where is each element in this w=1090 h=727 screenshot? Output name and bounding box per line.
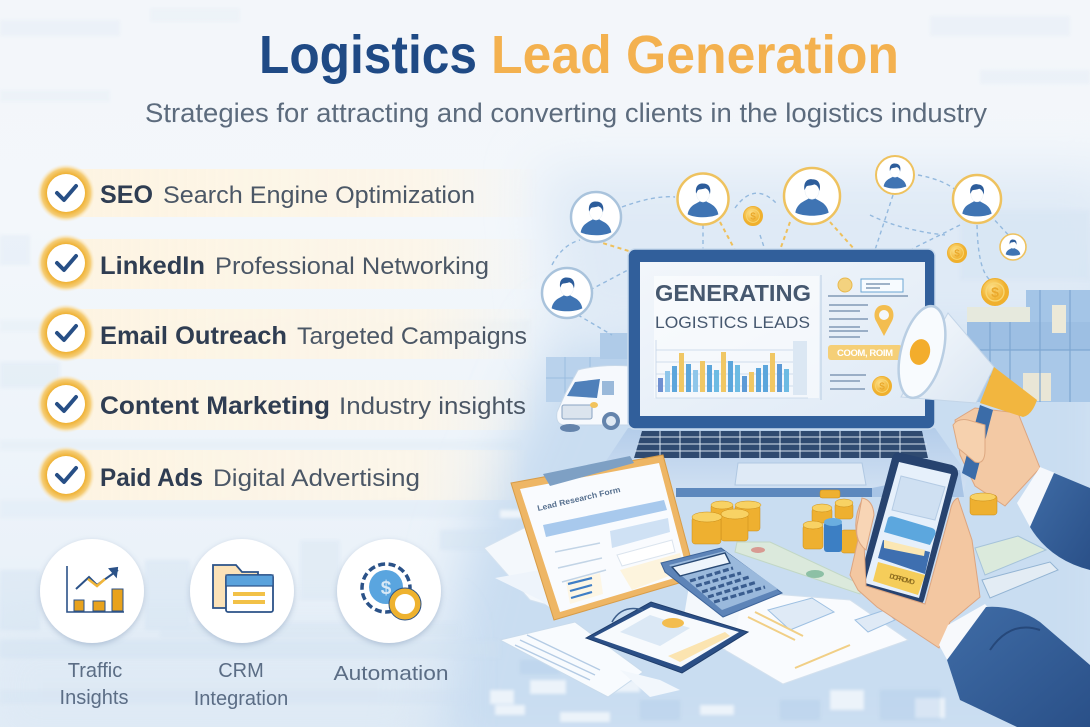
tablet (586, 602, 748, 673)
suit sleeve top (1017, 467, 1090, 570)
title: Logistics (259, 25, 477, 85)
feature: Traffic Insights (40, 539, 144, 709)
checklist (37, 164, 540, 504)
subtitle: Strategies for attracting and converting clients in the logistics industry (145, 98, 988, 128)
icon: gear: $ (381, 578, 392, 599)
screen heading: LOGISTICS LEADS (655, 313, 810, 332)
item: Paid Ads: Digital Advertising (213, 465, 420, 492)
phone: DO PROMO (888, 573, 916, 587)
bar chart (656, 340, 808, 398)
item: Content Marketing: Industry insights (339, 393, 526, 420)
item: Content Marketing: Content Marketing (100, 392, 330, 420)
item: LinkedIn: Professional Networking (215, 253, 489, 280)
feature: CRM Integration (190, 539, 294, 710)
screen heading (655, 280, 811, 332)
avatar 6 (1000, 234, 1026, 260)
avatar 5 (953, 175, 1001, 223)
icon: growth chart (67, 566, 124, 612)
avatar 4 (876, 156, 914, 194)
documents (484, 525, 1058, 697)
phone (859, 453, 958, 606)
illustration: delivery van (557, 366, 630, 432)
screen (640, 262, 925, 416)
screen heading: GENERATING (655, 280, 811, 306)
label: Automation (334, 663, 448, 685)
dashboard side panel (828, 278, 908, 396)
title (259, 25, 899, 85)
illustration: shipping containers left (546, 333, 630, 402)
avatar 1 (571, 192, 621, 242)
icon: folder and window (213, 565, 273, 612)
item: Content Marketing (37, 375, 540, 433)
suit sleeve bottom (939, 604, 1090, 727)
coin stacks behind papers (692, 490, 997, 553)
keyboard base (600, 428, 968, 497)
dashboard side panel: COOM, ROIM (837, 348, 893, 359)
feature: Automation (334, 539, 448, 685)
item: SEO: SEO (100, 181, 153, 209)
label: Integration (194, 688, 288, 710)
item: Email Outreach: Email Outreach (100, 322, 287, 350)
network connection lines (552, 175, 1013, 335)
calculator (661, 548, 782, 617)
hand holding phone (850, 498, 980, 648)
avatar 7 (542, 268, 592, 318)
avatar 2 (678, 174, 728, 224)
hand holding megaphone (953, 405, 1040, 506)
illustration: shipping containers right (967, 290, 1090, 402)
coins floating (743, 206, 1008, 305)
item: Paid Ads (37, 446, 530, 504)
item: LinkedIn (37, 234, 540, 292)
item: LinkedIn: LinkedIn (100, 252, 205, 280)
item: SEO (37, 164, 540, 222)
item: Email Outreach: Targeted Campaigns (297, 323, 527, 350)
megaphone (890, 301, 1037, 417)
banknote strip (735, 542, 862, 594)
label: CRM (218, 660, 264, 682)
item: Email Outreach (37, 304, 540, 362)
label: Traffic (68, 660, 122, 682)
item: Paid Ads: Paid Ads (100, 464, 203, 492)
clipboard (511, 455, 696, 620)
icon: gear (362, 564, 421, 620)
laptop (600, 249, 968, 497)
label: Insights (60, 687, 128, 709)
clipboard: Lead Research Form (536, 485, 621, 513)
prospect avatars (542, 156, 1026, 318)
title: Lead Generation (491, 25, 899, 85)
avatar 3 (784, 168, 840, 224)
item: SEO: Search Engine Optimization (163, 182, 475, 209)
